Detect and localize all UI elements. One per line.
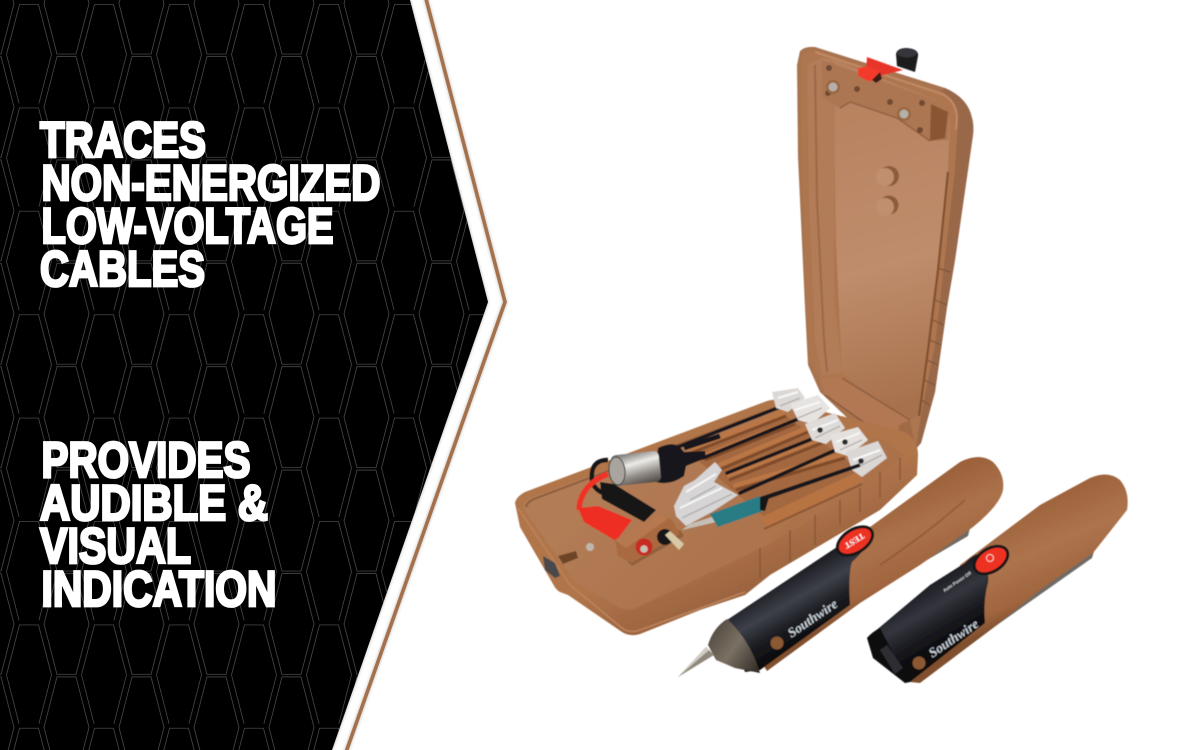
panel: black chevron with hexagon pattern — [0, 0, 488, 750]
brand mark: Southwire — [785, 596, 840, 640]
heading: provides audible and visual indication: AUDIBLE & — [40, 475, 268, 531]
cable wires — [678, 407, 860, 498]
coax connector — [608, 436, 720, 486]
heading: traces non-energized low-voltage cables: CABLES — [40, 241, 205, 297]
jack holder block — [615, 512, 684, 566]
probe: tone generator with power button — [867, 474, 1128, 683]
heading: provides audible and visual indication: INDICATION — [42, 561, 276, 617]
lid hinge — [820, 378, 914, 452]
mounting plate with screws — [822, 60, 950, 141]
labels and brand mark — [912, 570, 981, 670]
clear RJ connectors row — [772, 388, 887, 477]
heading: provides audible and visual indication: PROVIDES — [42, 432, 250, 488]
product: tone generator case and probes — [515, 47, 1128, 683]
icon: black knob on top of lid — [896, 48, 918, 72]
labels and brand mark: Auto Power Off — [942, 570, 973, 593]
red test button: TEST — [842, 531, 866, 551]
open lid — [797, 47, 973, 458]
base tray — [515, 400, 918, 635]
heading: traces non-energized low-voltage cables: NON-ENERGIZED — [42, 155, 380, 211]
icon: red slide switch — [858, 57, 903, 83]
silver blade and teal plug — [682, 465, 860, 530]
probe end socket — [880, 645, 903, 674]
lid ribs — [921, 268, 950, 405]
labels and brand mark: Southwire — [926, 616, 981, 660]
probe nose and metal tip — [678, 619, 760, 677]
lid pegs — [876, 166, 899, 216]
alligator clip leads — [578, 460, 656, 541]
heading: traces non-energized low-voltage cables: TRACES — [40, 112, 206, 168]
brand mark — [770, 596, 840, 650]
red test button — [830, 519, 880, 563]
loose RJ connector — [674, 462, 738, 526]
probe: tone tracer with test button — [678, 457, 1003, 677]
screw and slot on the tray — [543, 543, 594, 578]
heading: provides audible and visual indication: VISUAL — [40, 518, 191, 574]
heading: provides audible and visual indication — [40, 432, 276, 617]
arrow outline: brown chevron line — [345, 0, 505, 750]
red power button — [967, 538, 1015, 582]
cable trays — [688, 412, 862, 529]
heading: traces non-energized low-voltage cables: LOW-VOLTAGE — [42, 198, 334, 254]
heading: traces non-energized low-voltage cables — [40, 112, 380, 297]
